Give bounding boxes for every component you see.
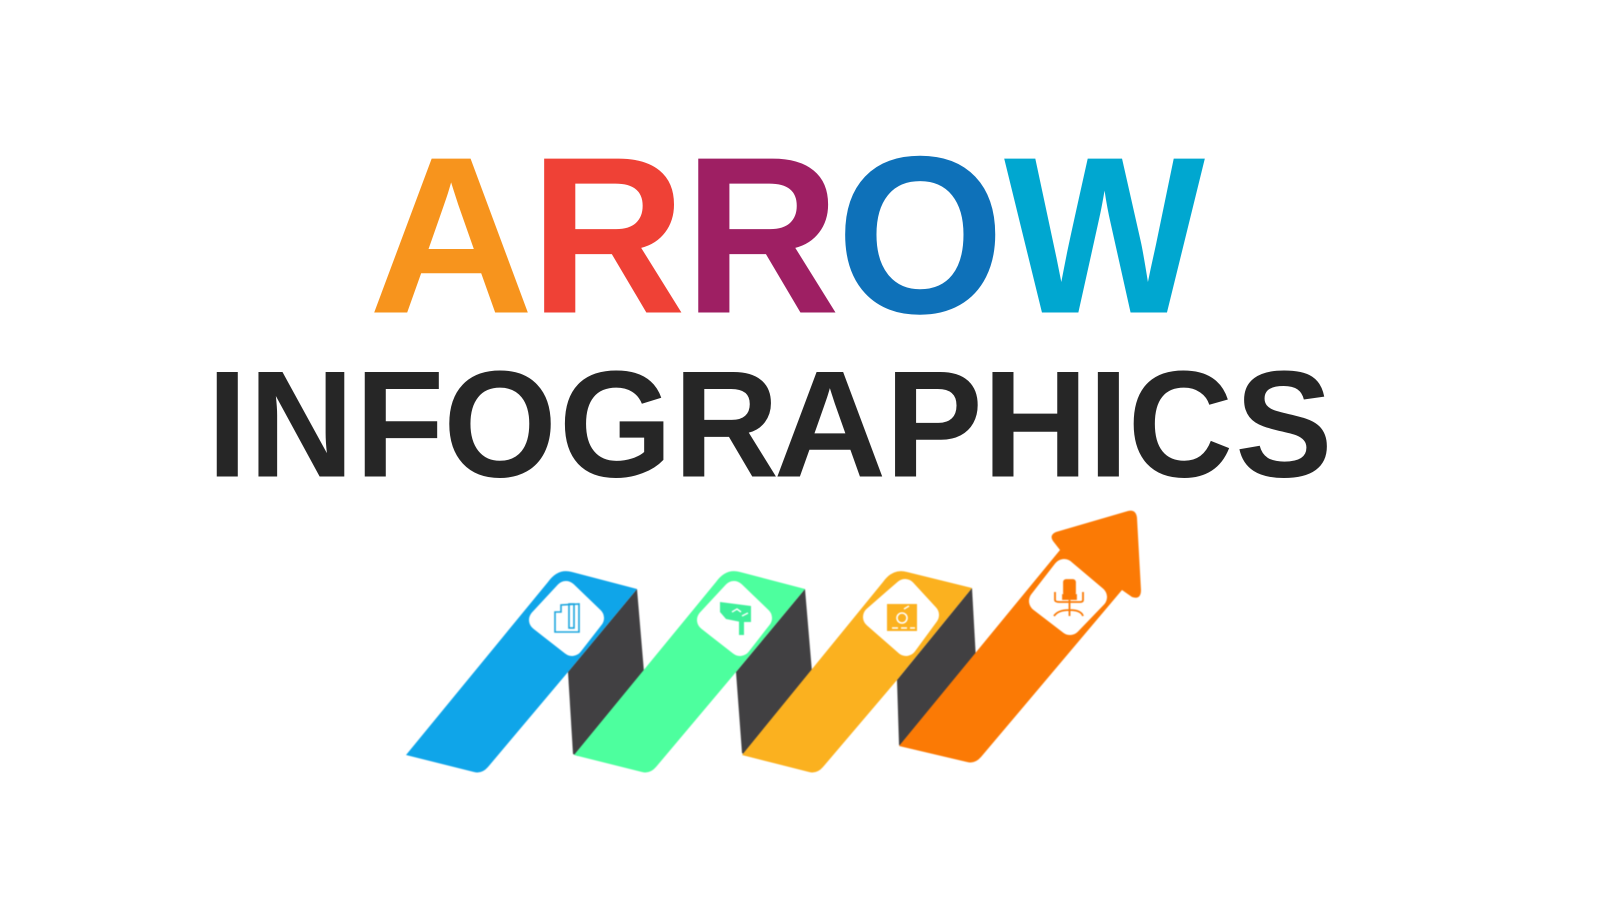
subtitle: INFOGRAPHICS: INFOGR — [207, 339, 779, 509]
title: ARROW: A — [368, 110, 534, 360]
badge 3: gallery icon — [874, 590, 928, 645]
title: ARROW — [368, 110, 1205, 361]
segment 3: yellow — [742, 571, 972, 772]
icon: zip file — [555, 604, 579, 632]
badge 4: office chair icon — [1040, 570, 1096, 624]
title: ARROW: W — [1004, 111, 1205, 361]
segment 1: blue — [406, 571, 637, 772]
segment 2: green — [574, 571, 805, 772]
title: ARROW: R — [684, 110, 840, 360]
white diamond — [1040, 570, 1096, 624]
subtitle: INFOGRAPHICS: A — [774, 339, 886, 509]
subtitle: INFOGRAPHICS: PHICS — [885, 339, 1333, 509]
badge 2: sign icon — [708, 592, 761, 645]
arrow graphic — [406, 511, 1141, 772]
title: ARROW: R — [530, 110, 686, 360]
icon: presentation board — [887, 604, 917, 631]
white diamond — [540, 592, 593, 645]
subtitle: INFOGRAPHICS — [207, 339, 1333, 509]
icon: signpost — [720, 602, 751, 635]
dark fold 3 — [897, 588, 976, 747]
icon: chair — [1054, 580, 1083, 616]
segment 4: orange arrow — [899, 511, 1141, 762]
dark fold 1 — [568, 589, 644, 756]
white diamond — [708, 592, 761, 645]
dark fold 2 — [736, 589, 812, 756]
white diamond — [874, 590, 928, 645]
badge 1: file icon — [540, 592, 593, 645]
title: ARROW: O — [836, 110, 1004, 360]
